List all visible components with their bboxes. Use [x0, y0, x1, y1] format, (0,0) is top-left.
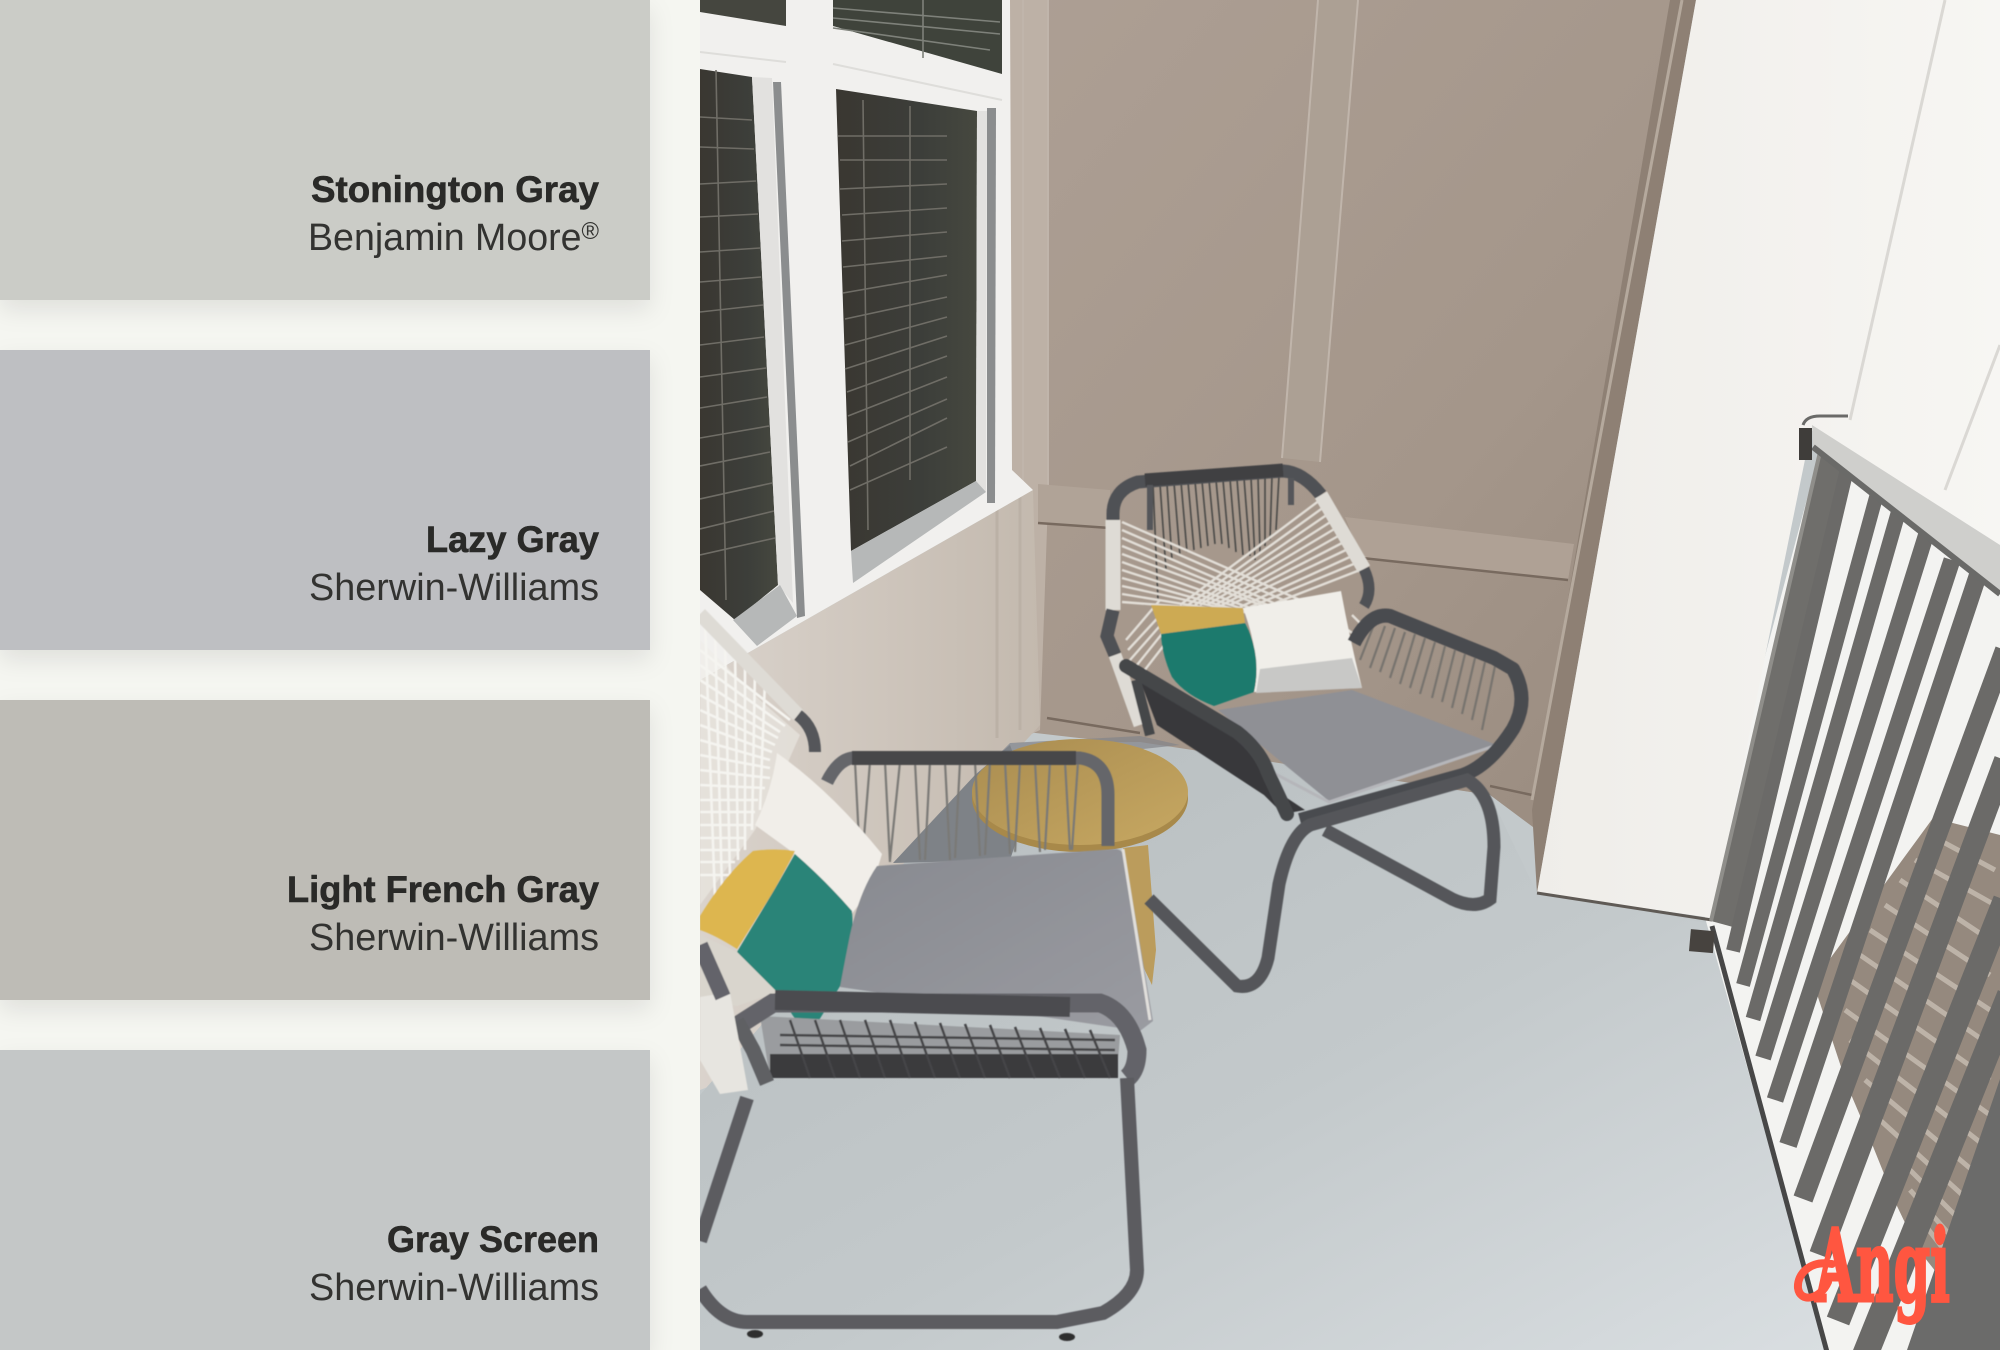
rear chair	[1107, 470, 1522, 986]
back wall	[1008, 0, 1696, 893]
front chair far arm strings	[855, 762, 1078, 862]
panel: Light French Gray swatch	[0, 700, 650, 1000]
rear chair legs	[1149, 780, 1494, 986]
panel: Lazy Gray swatch	[0, 350, 650, 650]
upper left pane	[700, 0, 786, 26]
panel: Stonington Gray swatch: Stonington Gray	[311, 169, 599, 210]
front chair mesh	[760, 1016, 1120, 1070]
rear chair seat mesh	[1140, 680, 1305, 814]
rear chair pillow	[1151, 591, 1362, 706]
panel: Light French Gray swatch: Light French Gray	[287, 869, 599, 910]
panel: Lazy Gray swatch: Sherwin-Williams	[309, 567, 599, 609]
front chair front arm	[737, 1003, 1137, 1078]
rear chair back frame	[1113, 471, 1321, 530]
panel: Stonington Gray swatch	[0, 0, 650, 300]
rear chair cushion	[1218, 690, 1497, 801]
front chair cushion	[840, 849, 1153, 1031]
handrail	[1812, 425, 2000, 594]
logo: Angi	[1794, 1224, 1950, 1325]
mulch ground	[1818, 819, 2000, 1270]
front chair far arm	[827, 758, 1108, 846]
front chair back strings	[700, 668, 800, 904]
rear chair right arm strings	[1360, 622, 1495, 730]
rear chair arm and seat frame	[1126, 666, 1287, 814]
base rail	[1712, 926, 1827, 1350]
lower left pane	[700, 69, 778, 620]
panel: Gray Screen swatch: Gray Screen	[387, 1219, 599, 1260]
front chair legs	[700, 1078, 1137, 1322]
side wall under windows	[700, 490, 1040, 1090]
panel: Stonington Gray swatch: Benjamin Moore	[308, 217, 585, 259]
rear chair strings	[1153, 476, 1279, 600]
front chair pillow	[700, 753, 882, 1038]
window frame and panes	[700, 0, 1033, 680]
panel: Gray Screen swatch: Sherwin-Williams	[309, 1267, 599, 1309]
railing	[1689, 416, 2000, 1350]
front chair wrapped post	[700, 992, 748, 1094]
white column	[1537, 0, 2000, 920]
outside view behind railing	[1700, 450, 2000, 1350]
panel: Gray Screen swatch	[0, 1050, 650, 1350]
front chair	[700, 614, 1153, 1341]
photo: balcony with two chairs	[700, 0, 2000, 1350]
upper right pane	[833, 0, 1002, 74]
side table	[972, 739, 1188, 985]
lower right pane	[836, 89, 977, 551]
panel: Light French Gray swatch: Sherwin-Williams	[309, 917, 599, 959]
panel: Lazy Gray swatch: Lazy Gray	[426, 519, 599, 560]
dark floor under far arm	[893, 745, 1015, 863]
floor	[700, 742, 1830, 1350]
panel: Stonington Gray swatch: ®	[582, 218, 599, 245]
